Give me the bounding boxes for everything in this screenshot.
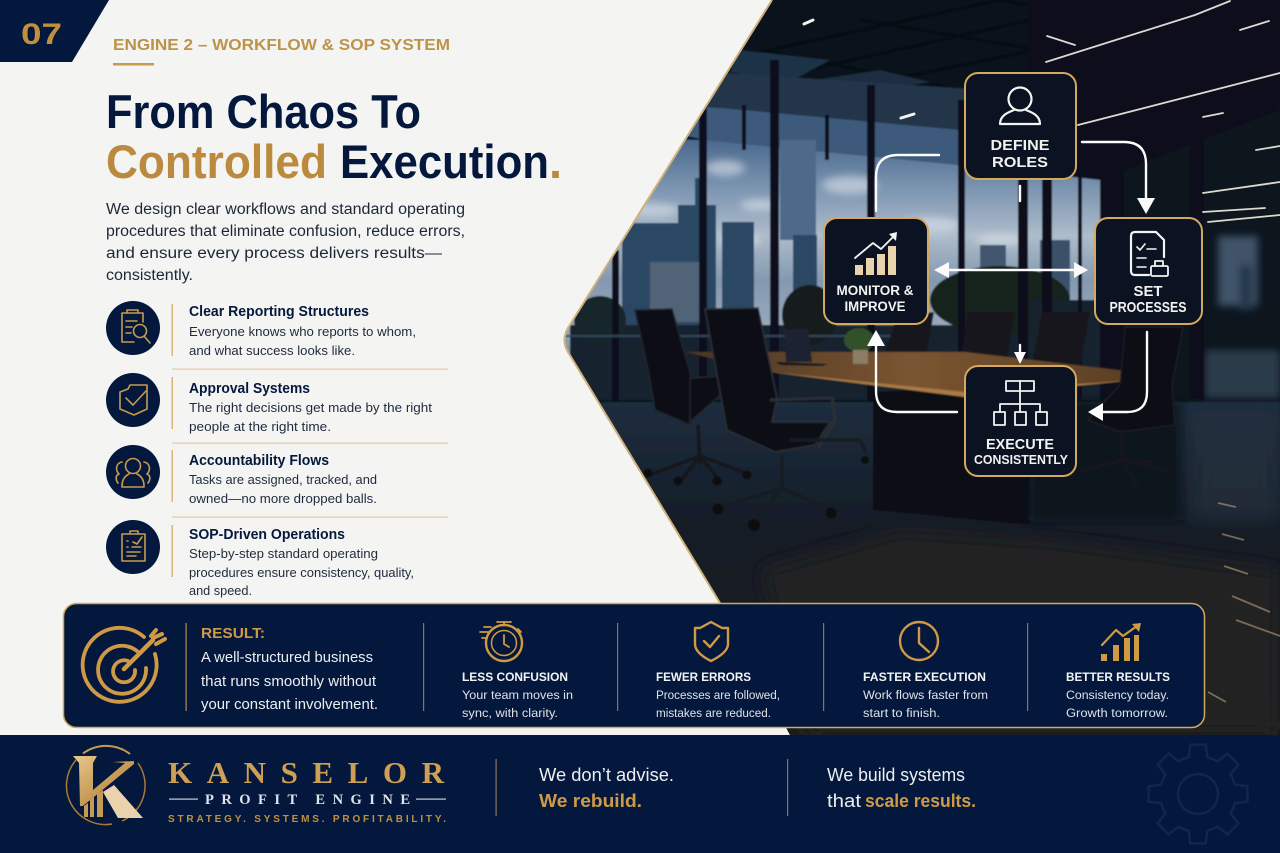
arrow: monitor and set two-way — [934, 262, 1088, 278]
benefit: faster execution: Work flows faster from — [863, 688, 988, 702]
icon: faint gear — [1149, 745, 1247, 843]
window mullions — [612, 40, 1204, 405]
boardroom photo panel — [560, 0, 1280, 735]
benefit: better results: Growth tomorrow. — [1066, 706, 1168, 720]
node: execute consistently — [965, 366, 1076, 476]
benefit: fewer errors — [656, 622, 780, 720]
tagline: scale results: We build systems — [827, 765, 965, 785]
icon: shield with check — [695, 622, 728, 661]
list item: accountability flows: owned—no more dropped balls. — [189, 492, 377, 506]
benefit: less confusion: sync, with clarity. — [462, 706, 558, 720]
benefit: faster execution — [863, 622, 988, 720]
result bar — [64, 604, 1204, 728]
photo panel gold edge — [564, 0, 772, 603]
floor — [560, 402, 1280, 735]
icon: clipboard with magnifier — [106, 301, 160, 355]
list item: accountability flows — [106, 445, 377, 506]
chair left — [635, 309, 724, 425]
trees and waterfront — [569, 324, 1032, 401]
icon: checklist document — [1131, 232, 1168, 276]
plant — [844, 328, 874, 352]
intro paragraph: consistently. — [106, 267, 193, 284]
intro paragraph: procedures that eliminate confusion, reduce errors, — [106, 223, 465, 240]
benefit: better results — [1066, 623, 1170, 720]
arrow: monitor to define — [876, 155, 939, 211]
title: Execution — [340, 135, 549, 188]
back chairs — [882, 312, 1090, 366]
clouds — [620, 160, 1025, 248]
upper tinted glass — [700, 72, 1020, 150]
list item: accountability flows: Accountability Flows — [189, 453, 329, 469]
node: set processes — [1095, 218, 1202, 324]
tagline: scale results — [827, 765, 976, 811]
divider — [186, 623, 187, 711]
intro paragraph: and ensure every process delivers results— — [106, 245, 443, 262]
title: Controlled — [106, 135, 327, 188]
arrow: execute to monitor — [867, 330, 957, 412]
result statement: that runs smoothly without — [201, 674, 376, 690]
page number tab: 07 — [21, 18, 62, 51]
list item: approval systems: people at the right time. — [189, 420, 331, 434]
arrow: set to execute — [1088, 332, 1147, 421]
title: . — [549, 135, 562, 188]
laptop — [784, 329, 812, 362]
node: monitor and improve — [824, 218, 928, 324]
floor reflections — [1208, 503, 1280, 702]
window glass — [560, 135, 1100, 400]
ceiling lights — [804, 1, 1280, 222]
list item: sop-driven operations: Step-by-step standard operating — [189, 547, 378, 561]
far right window glimpse — [1205, 236, 1280, 398]
section eyebrow: ENGINE 2 – WORKFLOW & SOP SYSTEM — [113, 37, 450, 54]
benefit: less confusion: Your team moves in — [462, 688, 573, 702]
icon: growth chart — [1101, 623, 1141, 661]
skyline — [622, 140, 1070, 330]
ceiling grid — [700, 0, 1280, 90]
list item: accountability flows: Tasks are assigned, tracked, and — [189, 473, 377, 487]
icon: person — [1000, 88, 1040, 124]
node: set processes: SET — [1134, 284, 1163, 300]
result statement: RESULT: — [201, 626, 265, 642]
process cycle diagram — [824, 73, 1202, 476]
logo wordmark: STRATEGY. SYSTEMS. PROFITABILITY. — [168, 814, 446, 825]
icon: target with arrow — [83, 628, 165, 702]
benefit: fewer errors: mistakes are reduced. — [656, 706, 771, 720]
benefit: better results: Consistency today. — [1066, 688, 1169, 702]
node: monitor and improve: MONITOR & — [836, 283, 914, 298]
icon: people group — [106, 445, 160, 499]
benefit: less confusion: LESS CONFUSION — [462, 670, 568, 684]
list item: clear reporting structures — [106, 301, 416, 358]
tagline: scale results: that — [827, 791, 861, 811]
logo wordmark: KANSELOR — [168, 755, 445, 790]
icon: checklist clipboard — [106, 520, 160, 574]
list item: approval systems: Approval Systems — [189, 381, 310, 397]
logo mark — [66, 746, 145, 825]
icon: org chart — [994, 381, 1047, 425]
benefit: faster execution: start to finish. — [863, 706, 940, 720]
benefit: fewer errors: FEWER ERRORS — [656, 670, 751, 684]
node: define roles — [965, 73, 1076, 179]
dark right interior — [1124, 110, 1280, 402]
benefit: better results: BETTER RESULTS — [1066, 670, 1170, 684]
node: set processes: PROCESSES — [1110, 300, 1187, 316]
node: monitor and improve: IMPROVE — [844, 299, 906, 314]
title: From Chaos To — [106, 85, 421, 138]
icon: clock — [900, 622, 938, 660]
footer — [0, 735, 1280, 853]
tagline: rebuild: We rebuild. — [539, 790, 642, 811]
list item: clear reporting structures: and what success looks like. — [189, 344, 355, 358]
node: execute consistently: EXECUTE — [986, 437, 1054, 453]
table base — [873, 385, 1030, 525]
tagline: rebuild: We don’t advise. — [539, 765, 674, 785]
node: define roles: DEFINE — [990, 138, 1050, 154]
tagline: scale results: scale results. — [865, 791, 976, 811]
result statement: your constant involvement. — [201, 697, 378, 713]
list item: clear reporting structures: Clear Reporting Structures — [189, 304, 369, 320]
list item: sop-driven operations: and speed. — [189, 584, 252, 598]
arrow: define to execute — [1014, 186, 1026, 364]
list item: approval systems: The right decisions get made by the right — [189, 401, 433, 415]
intro paragraph: We design clear workflows and standard operating — [106, 201, 465, 218]
tagline: rebuild — [539, 765, 674, 811]
result statement — [201, 626, 378, 713]
list item: approval systems — [106, 373, 433, 434]
list item: sop-driven operations — [106, 520, 414, 598]
benefit: faster execution: FASTER EXECUTION — [863, 670, 986, 684]
benefit: fewer errors: Processes are followed, — [656, 688, 780, 702]
chair front — [705, 308, 830, 452]
icon: rising bar chart — [855, 232, 897, 275]
page number tab — [0, 0, 109, 62]
chair right — [1088, 327, 1183, 432]
node: define roles: ROLES — [992, 155, 1048, 171]
logo wordmark — [168, 755, 446, 825]
node: execute consistently: CONSISTENTLY — [974, 452, 1068, 467]
list item: clear reporting structures: Everyone knows who reports to whom, — [189, 325, 416, 339]
table top — [685, 352, 1135, 397]
icon: stopwatch — [480, 622, 522, 661]
title — [106, 85, 562, 188]
arrow: define to set — [1082, 142, 1155, 214]
benefit: less confusion — [462, 622, 573, 720]
logo wordmark: PROFIT ENGINE — [205, 792, 410, 808]
intro paragraph — [106, 201, 465, 284]
icon: approval document — [106, 373, 160, 427]
list item: sop-driven operations: procedures ensure consistency, quality, — [189, 566, 414, 580]
list item: sop-driven operations: SOP-Driven Operations — [189, 527, 345, 543]
result statement: A well-structured business — [201, 650, 373, 666]
